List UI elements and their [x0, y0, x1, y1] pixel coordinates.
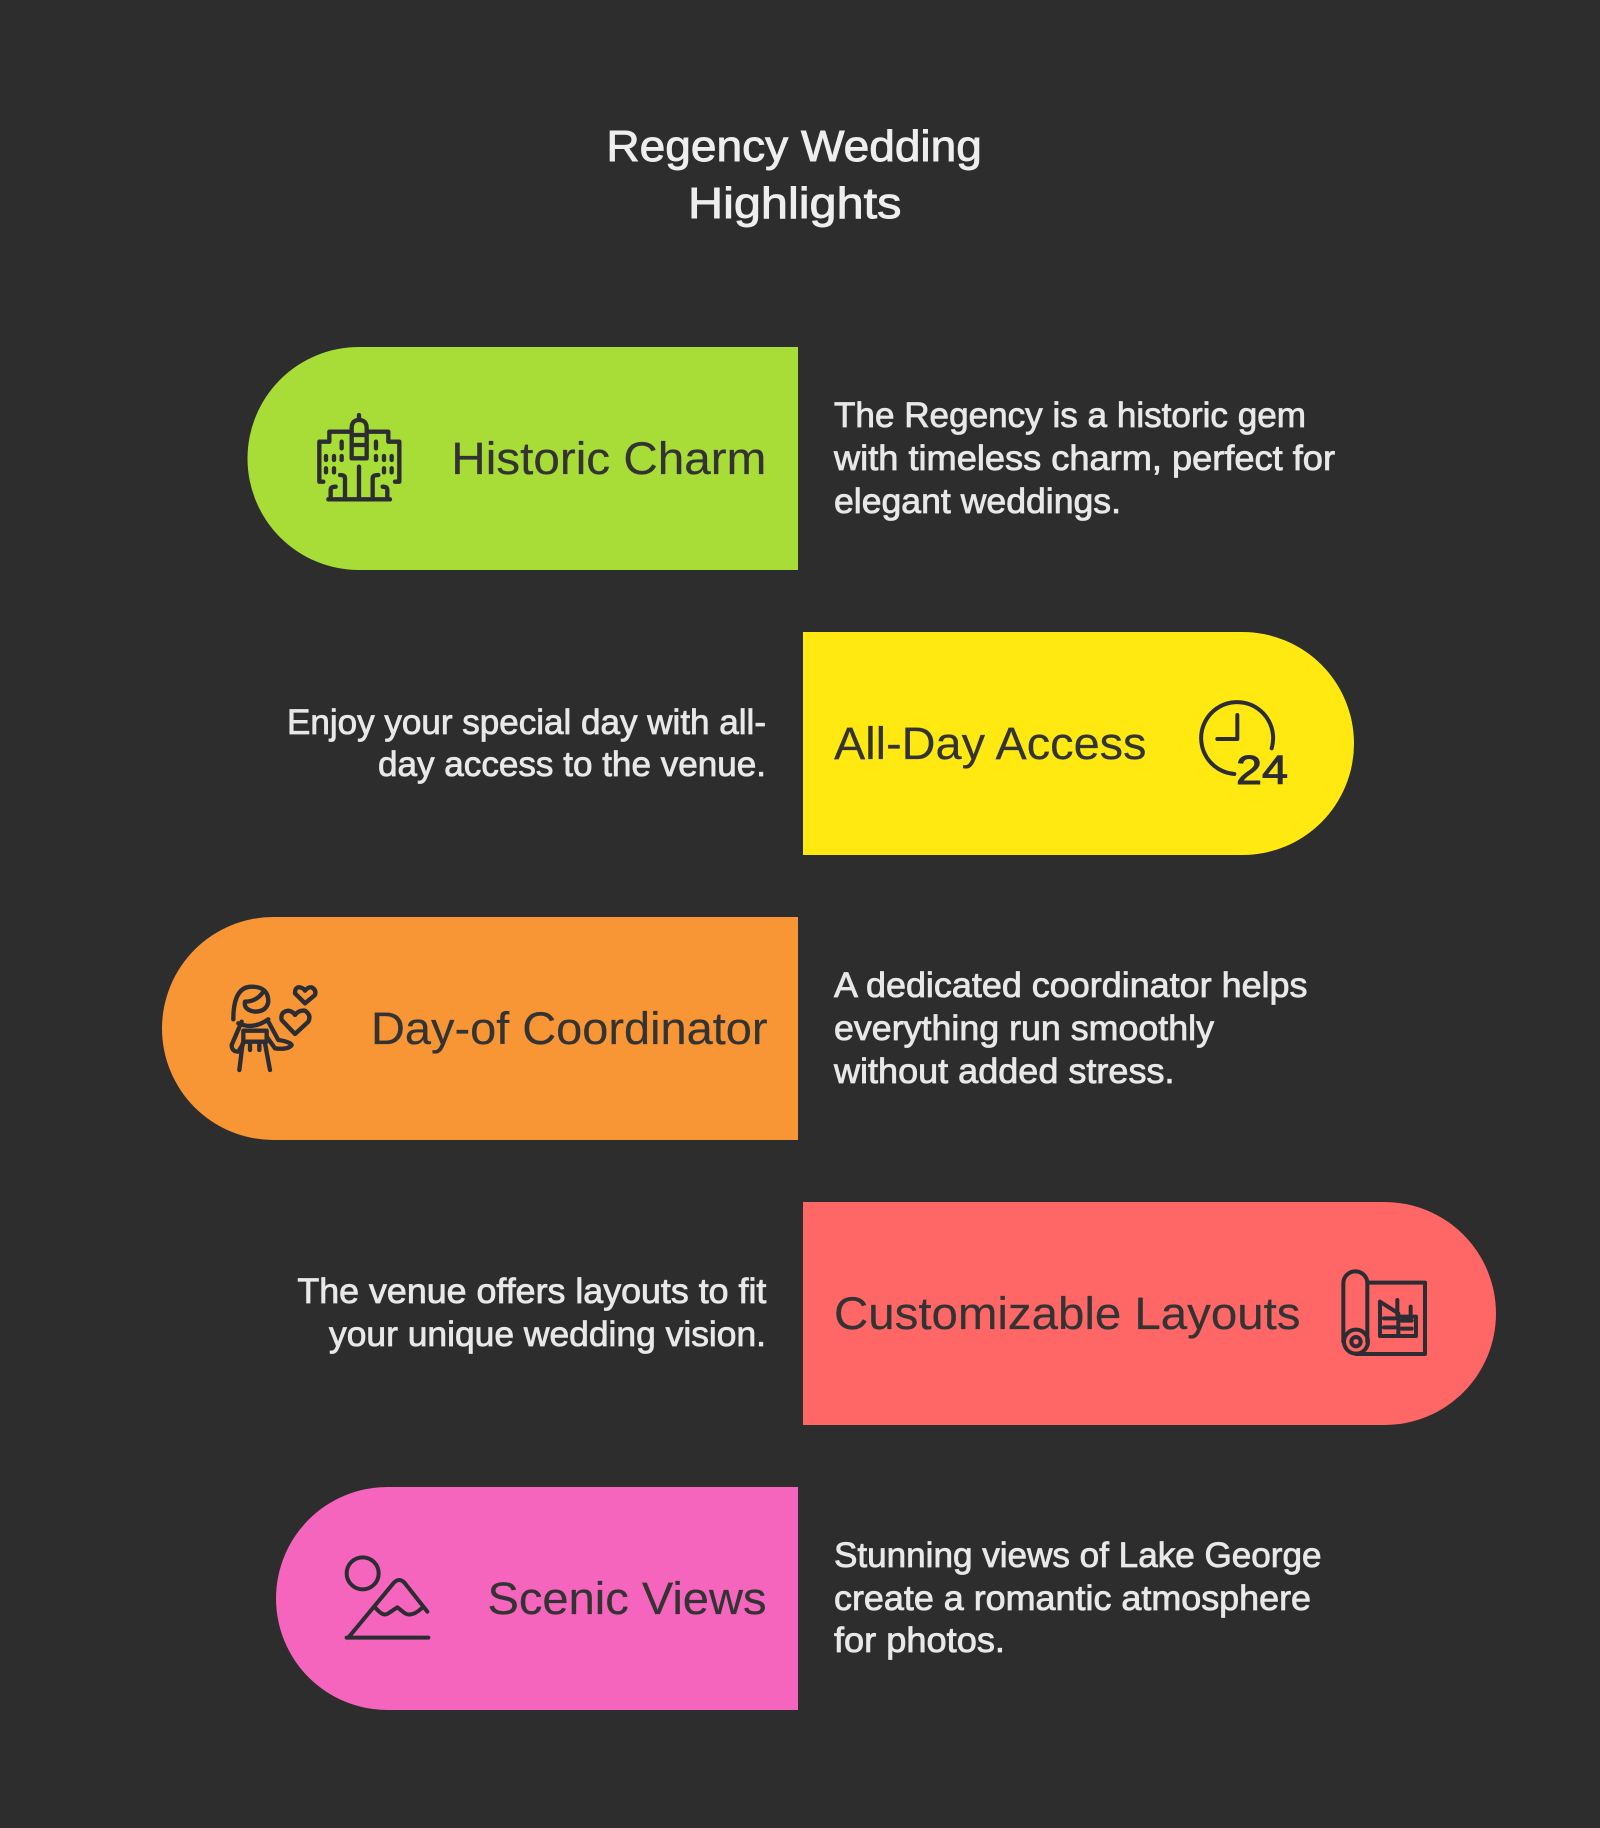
icon: floor plan roll: [1343, 1271, 1425, 1354]
description: [834, 1536, 1322, 1660]
icon: bride with hearts: [232, 987, 315, 1070]
description: [287, 703, 766, 784]
icon: historic building: [319, 415, 399, 499]
label: All-Day Access: [834, 718, 1146, 769]
label: Scenic Views: [488, 1573, 766, 1624]
description: [833, 966, 1308, 1091]
label: Day-of Coordinator: [371, 1003, 768, 1054]
description: create a romantic atmosphere: [834, 1579, 1311, 1618]
description: [297, 1272, 767, 1354]
pill: pink: [276, 1487, 798, 1710]
description: with timeless charm, perfect for: [833, 439, 1335, 478]
panel: Customizable Layouts: [297, 1202, 1496, 1425]
title: Regency Wedding: [606, 122, 982, 171]
panel: Historic Charm: [248, 347, 1335, 570]
description: The venue offers layouts to fit: [297, 1272, 767, 1311]
description: for photos.: [834, 1621, 1005, 1660]
description: elegant weddings.: [834, 482, 1121, 521]
description: your unique wedding vision.: [329, 1315, 766, 1354]
pill: orange: [162, 917, 798, 1140]
icon: 24 hour clock: 24: [1236, 747, 1288, 793]
icon: mountain and sun: [347, 1557, 428, 1638]
label: Customizable Layouts: [834, 1288, 1300, 1339]
pill: yellow: [803, 632, 1354, 855]
description: [833, 396, 1335, 521]
pill: coral: [803, 1202, 1496, 1425]
description: everything run smoothly: [834, 1009, 1215, 1048]
panel: Scenic Views: [276, 1487, 1322, 1710]
label: Historic Charm: [451, 433, 766, 484]
panel: All-Day Access: [287, 632, 1354, 855]
description: day access to the venue.: [378, 745, 766, 784]
title: [606, 122, 982, 228]
title: Highlights: [688, 179, 901, 228]
description: Enjoy your special day with all-: [287, 703, 766, 742]
description: Stunning views of Lake George: [834, 1536, 1322, 1575]
pill: green: [248, 347, 798, 570]
description: A dedicated coordinator helps: [834, 966, 1308, 1005]
description: The Regency is a historic gem: [834, 396, 1306, 435]
panel: Day-of Coordinator: [162, 917, 1308, 1140]
description: without added stress.: [833, 1052, 1174, 1091]
icon: 24 hour clock: [1201, 702, 1288, 793]
